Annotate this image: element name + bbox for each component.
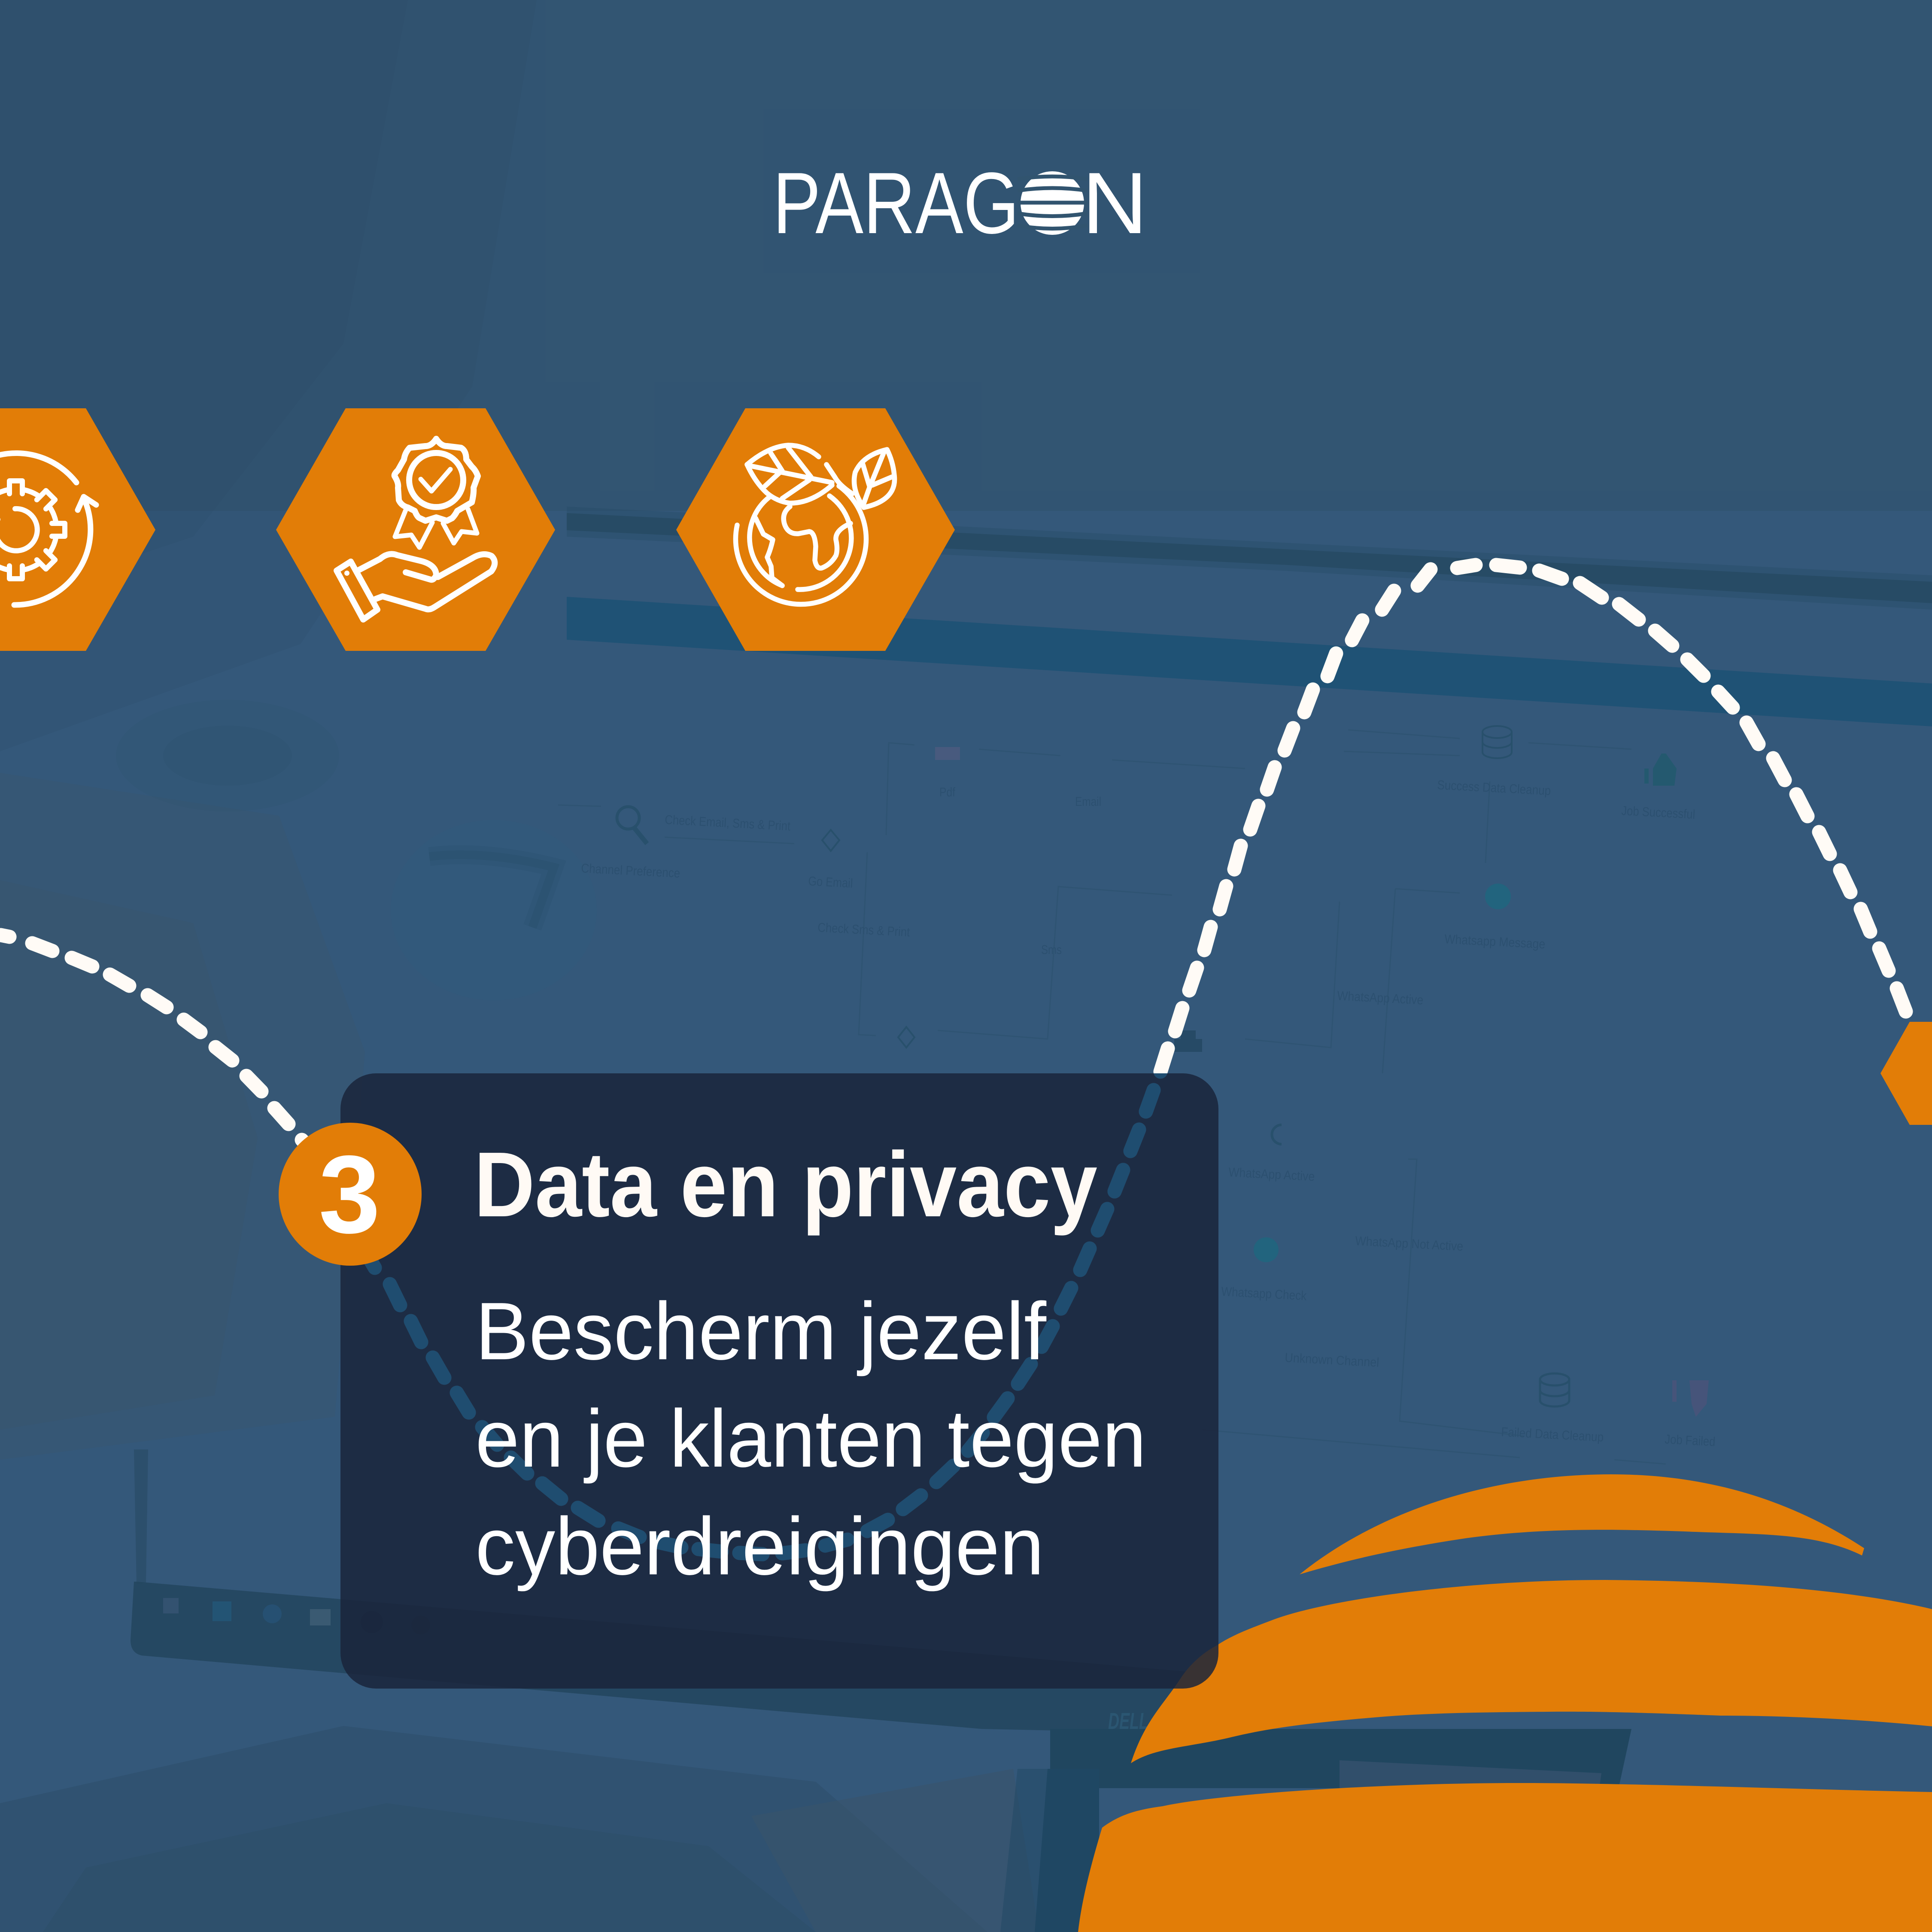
swoosh: middle band — [1131, 1580, 1932, 1763]
faint screen diagram in the photo: Check Sms & Print — [817, 920, 911, 939]
faint screen diagram in the photo: Check Email, Sms & Print — [665, 813, 791, 833]
text block: cyberdreigingen — [475, 1501, 1044, 1592]
faint screen diagram in the photo: Whatsapp Message — [1444, 932, 1546, 951]
heading: Data en privacy — [474, 1133, 1097, 1236]
text block — [475, 1286, 1146, 1592]
faint screen diagram in the photo: Failed Data Cleanup — [1501, 1425, 1604, 1444]
swoosh: top arc — [1300, 1474, 1864, 1574]
faint screen diagram in the photo: Sms — [1041, 943, 1062, 957]
number badge: 3: 3 — [319, 1132, 380, 1256]
text block: Bescherm jezelf — [475, 1286, 1047, 1377]
faint screen diagram in the photo: Go Email — [808, 874, 853, 890]
icon: globe with leaves — [735, 445, 895, 605]
hexagon: sustainability globe icon — [676, 408, 955, 651]
hexagon: next step partly off page — [1880, 1022, 1932, 1125]
faint screen diagram in the photo: Email — [1075, 795, 1101, 809]
faint screen diagram in the photo: Success Data Cleanup — [1437, 778, 1551, 798]
logo globe — [1018, 171, 1087, 235]
faint screen diagram in the photo: WhatsApp Active — [1337, 989, 1424, 1008]
number badge: 3 — [279, 1123, 422, 1266]
panel: callout box — [340, 1073, 1218, 1689]
faint screen diagram in the photo: DELL — [1108, 1708, 1148, 1734]
swoosh: bottom band — [1078, 1783, 1932, 1932]
faint screen diagram in the photo: WhatsApp Active — [1228, 1165, 1315, 1184]
hexagon: process gear icon — [0, 408, 155, 651]
dashed route line seen through the callout — [365, 1073, 1167, 1561]
callout text — [468, 1133, 1163, 1606]
dashed route line — [0, 558, 1913, 1689]
faint screen diagram in the photo: Whatsapp Check — [1221, 1285, 1307, 1303]
faint screen diagram in the photo: WhatsApp Not Active — [1355, 1234, 1464, 1254]
faint screen diagram in the photo: Job Successful — [1621, 804, 1695, 822]
faint screen diagram in the photo: Pdf — [939, 785, 956, 799]
hexagon: quality award in hand icon — [276, 408, 555, 651]
icon: gear with circular arrow — [0, 453, 96, 605]
faint screen diagram in the photo: Job Failed — [1665, 1432, 1716, 1449]
faint screen diagram in the photo: Channel Preference — [581, 861, 680, 881]
faint screen diagram in the photo: Unknown Channel — [1285, 1351, 1379, 1370]
icon: award rosette on open hand — [337, 439, 495, 620]
text block: en je klanten tegen — [475, 1393, 1146, 1484]
